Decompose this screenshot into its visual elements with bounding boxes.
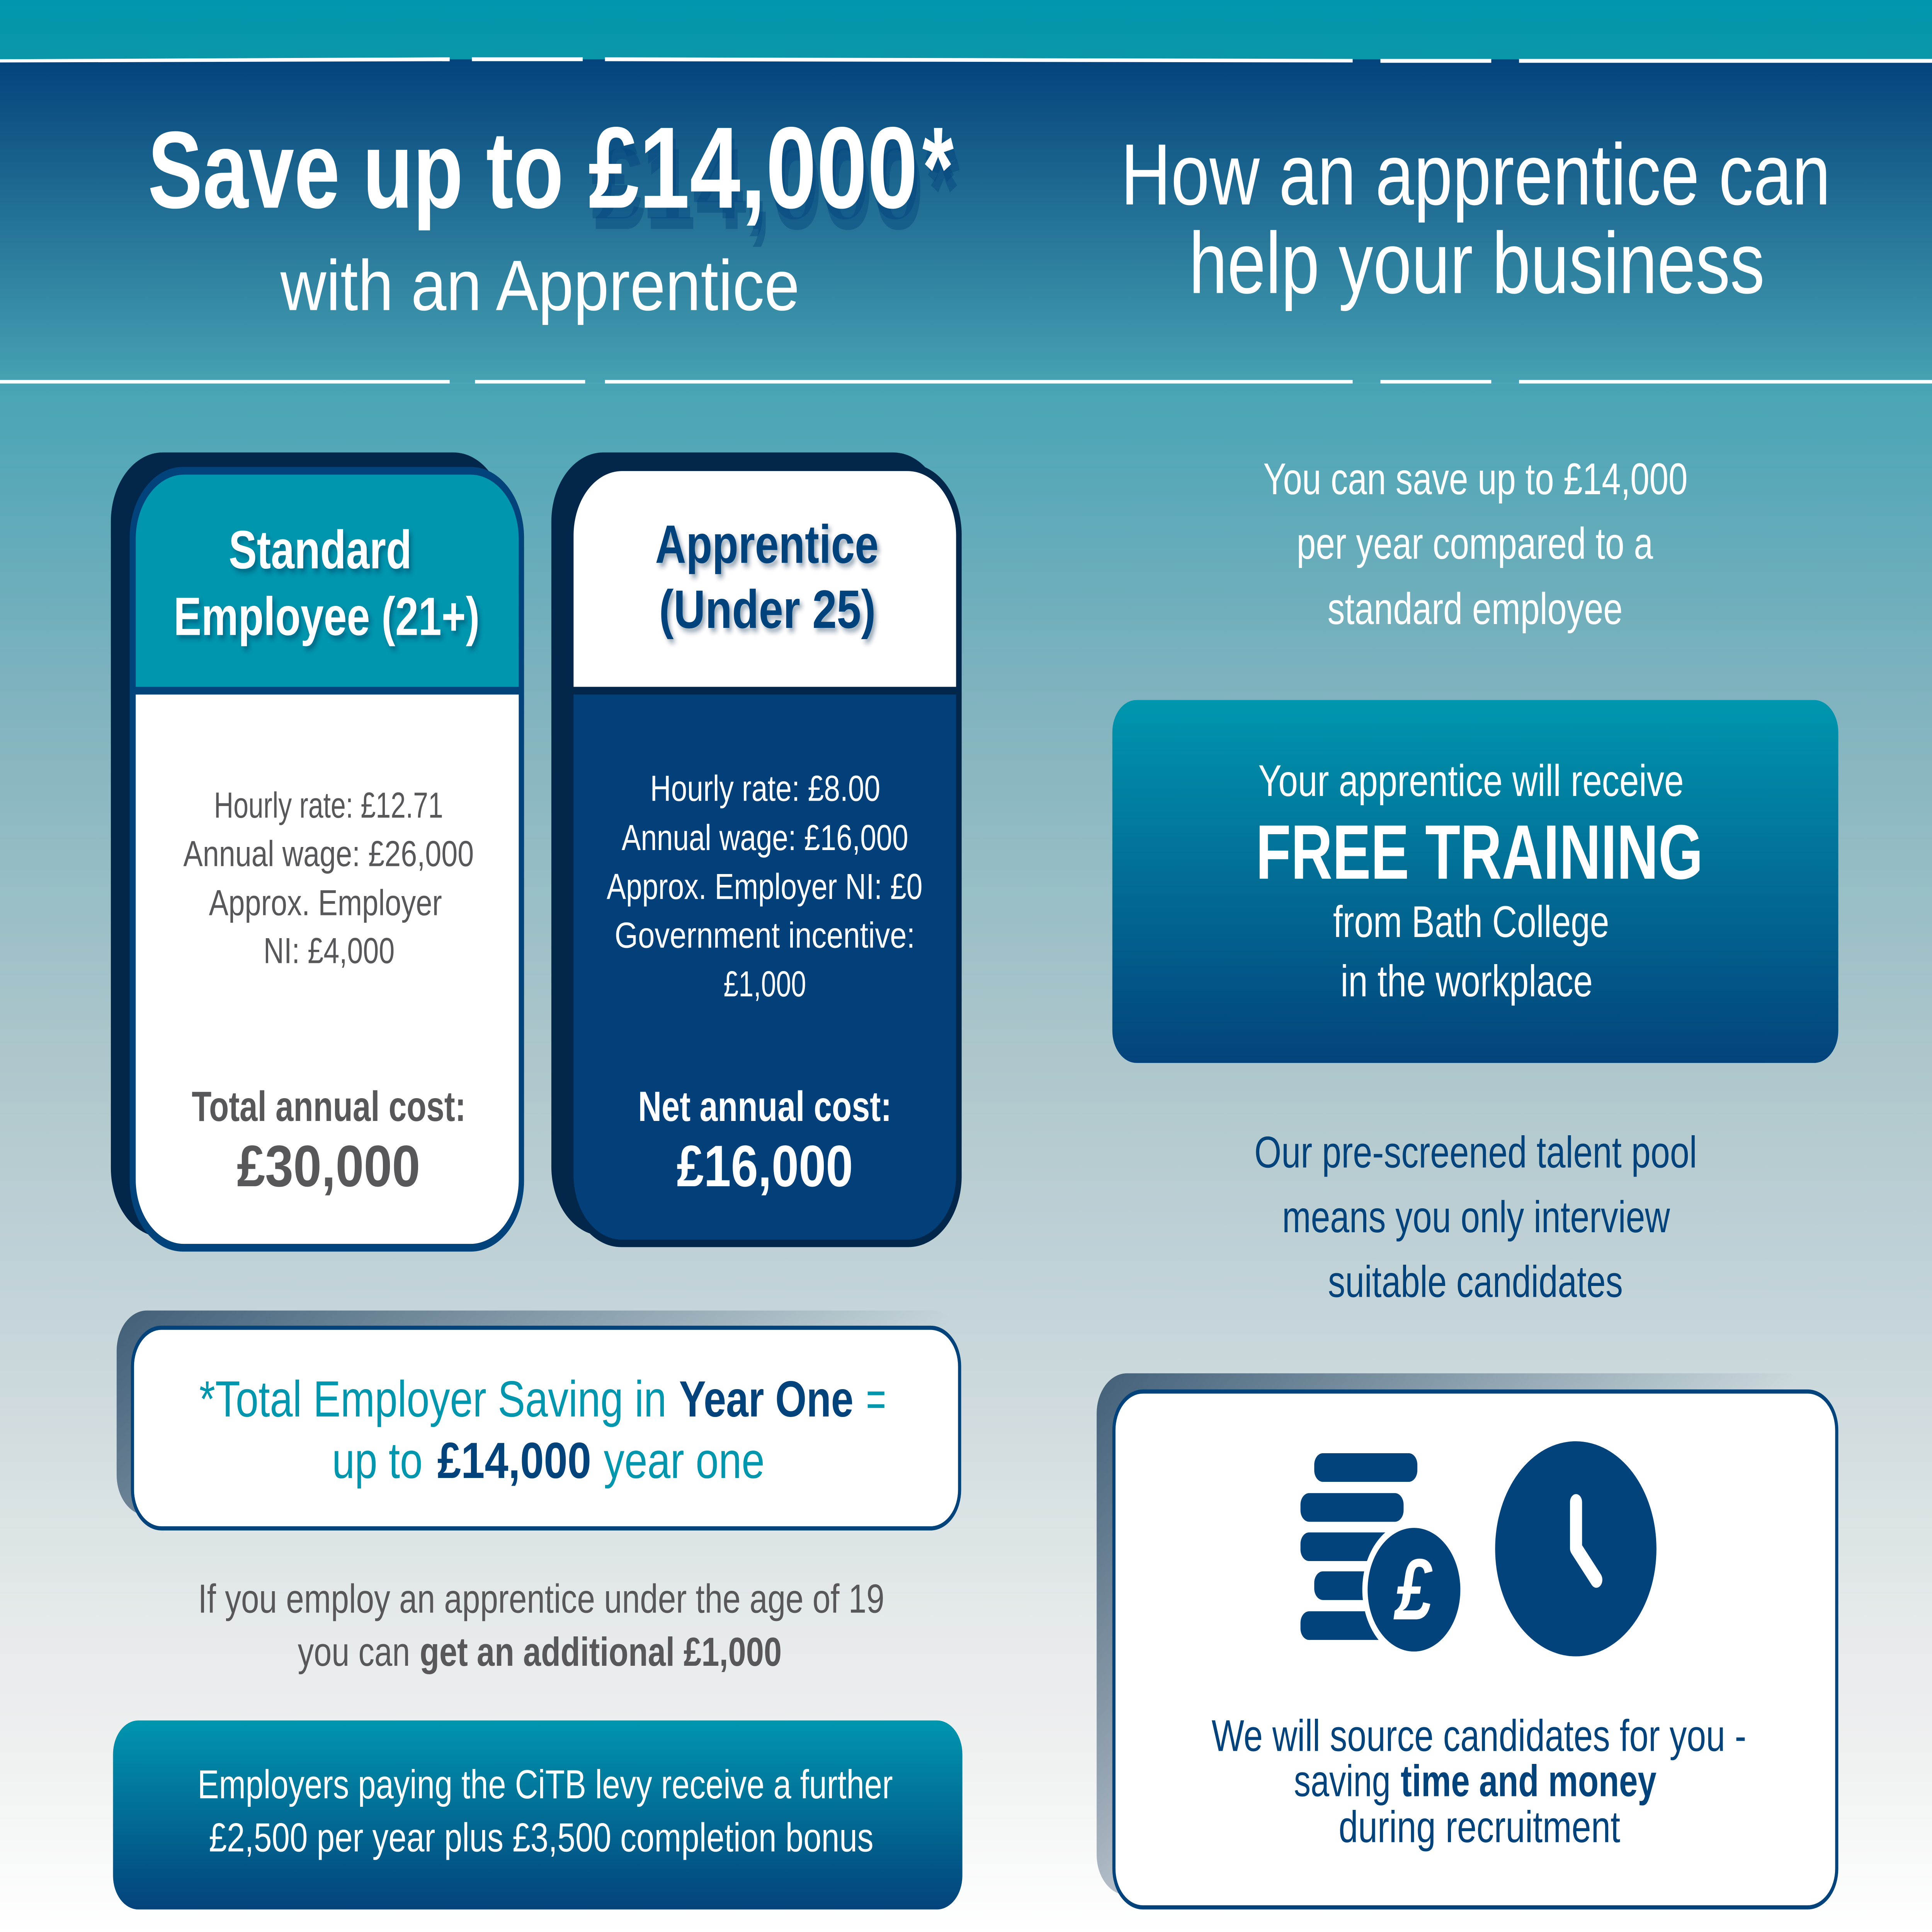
text: talent pool (1254, 1128, 1697, 1307)
text: talent pool: suitable candidates (1328, 1257, 1623, 1307)
panel: free training (1112, 700, 1838, 1063)
text: talent pool: Our pre-screened talent pool (1254, 1128, 1697, 1177)
panel: CiTB levy (113, 1720, 963, 1910)
text: you can save: You can save up to £14,000 (1263, 454, 1688, 504)
training text: in the workplace (1340, 956, 1593, 1006)
card border (130, 467, 524, 1252)
card heading: Employee (21+) (173, 587, 480, 647)
text: you can save: per year compared to a (1297, 519, 1653, 568)
card details: Hourly rate: £12.71 (214, 785, 443, 825)
panel text: time and money (1401, 1756, 1656, 1806)
text: you can save: standard employee (1328, 584, 1622, 634)
card total: £30,000 (237, 1134, 420, 1199)
card details: NI: £4,000 (264, 931, 395, 971)
card total (638, 1082, 892, 1199)
heading: how an apprentice can help: How an apprentice can (1121, 126, 1830, 223)
text: additional £1,000: If you employ an apprentice under the age of 19 (198, 1576, 884, 1621)
callout line one: = (866, 1371, 886, 1427)
top rule lines (0, 57, 1932, 63)
callout line two: year one (604, 1432, 765, 1489)
header band (0, 59, 1932, 383)
levy text: Employers paying the CiTB levy receive a further (197, 1762, 893, 1807)
card shadow (551, 452, 945, 1236)
card body (573, 695, 956, 1240)
icon: clock (1495, 1441, 1656, 1656)
panel text (1212, 1711, 1746, 1852)
training text: Your apprentice will receive (1258, 756, 1684, 806)
card heading (655, 514, 879, 640)
text: additional £1,000 (198, 1576, 884, 1674)
card total: £16,000 (677, 1134, 853, 1199)
card details: Annual wage: £26,000 (183, 834, 474, 874)
card details: Annual wage: £16,000 (622, 818, 908, 858)
panel box (1114, 1391, 1837, 1907)
top band (0, 0, 1932, 59)
card heading: (Under 25) (659, 579, 876, 640)
subtitle: with an Apprentice (280, 245, 799, 325)
training text: from Bath College (1333, 897, 1609, 947)
panel text: saving (1294, 1756, 1391, 1806)
title shadow: £14,000 (594, 124, 924, 254)
icon: coin stack: £ (1393, 1541, 1432, 1638)
title text: £14,000 (588, 103, 918, 233)
title text (148, 103, 954, 233)
callout line one (199, 1371, 886, 1427)
title text: * (922, 103, 954, 233)
heading: how an apprentice can help (1121, 126, 1831, 312)
training text: FREE TRAINING (1256, 809, 1703, 895)
card header (136, 474, 519, 687)
card border (568, 464, 962, 1247)
card heading (173, 520, 480, 647)
panel shadow (1097, 1373, 1815, 1895)
card shadow (111, 452, 505, 1237)
card total: Net annual cost: (638, 1082, 892, 1130)
panel: source candidates (1097, 1373, 1837, 1907)
text: you can save (1263, 454, 1688, 634)
card body (136, 695, 519, 1244)
callout box (133, 1328, 959, 1528)
card details (607, 769, 923, 1004)
callout line one: Year One (679, 1371, 854, 1427)
training text (1256, 756, 1703, 1006)
card details: Approx. Employer NI: £0 (607, 867, 923, 907)
title shadow: £14,000 (591, 114, 921, 243)
callout shadow (117, 1311, 963, 1515)
text: talent pool: means you only interview (1282, 1192, 1670, 1242)
text: additional £1,000: you can (298, 1629, 410, 1674)
card details (183, 785, 474, 971)
callout line two: £14,000 (437, 1432, 591, 1489)
card heading: Apprentice (655, 514, 879, 575)
levy text: £2,500 per year plus £3,500 completion bonus (209, 1815, 874, 1860)
card details: Government incentive: (615, 915, 915, 956)
card total (192, 1082, 466, 1199)
callout: total employer saving (117, 1311, 963, 1528)
panel text: We will source candidates for you - (1212, 1711, 1746, 1761)
levy text (197, 1762, 893, 1860)
callout line two (332, 1432, 765, 1489)
callout line two: up to (332, 1432, 423, 1489)
card heading: Standard (229, 520, 412, 580)
training box (1112, 700, 1838, 1063)
card details: £1,000 (723, 964, 806, 1004)
heading: how an apprentice can help: help your business (1189, 215, 1765, 312)
panel: standard employee (111, 452, 524, 1252)
card details: Approx. Employer (209, 883, 442, 923)
card header (573, 471, 956, 687)
icon: coin stack (1301, 1453, 1466, 1658)
title: save up to (148, 103, 960, 254)
title shadow: * (925, 114, 957, 243)
card details: Hourly rate: £8.00 (650, 769, 880, 809)
title shadow: * (929, 124, 960, 254)
panel: apprentice (551, 452, 962, 1247)
bottom rule lines (0, 380, 1932, 383)
title text: Save up to (148, 109, 564, 231)
text: additional £1,000: get an additional £1,000 (420, 1629, 782, 1674)
callout line one: *Total Employer Saving in (199, 1371, 667, 1427)
card total: Total annual cost: (192, 1082, 466, 1130)
panel text: during recruitment (1338, 1802, 1620, 1852)
levy box (113, 1720, 963, 1910)
